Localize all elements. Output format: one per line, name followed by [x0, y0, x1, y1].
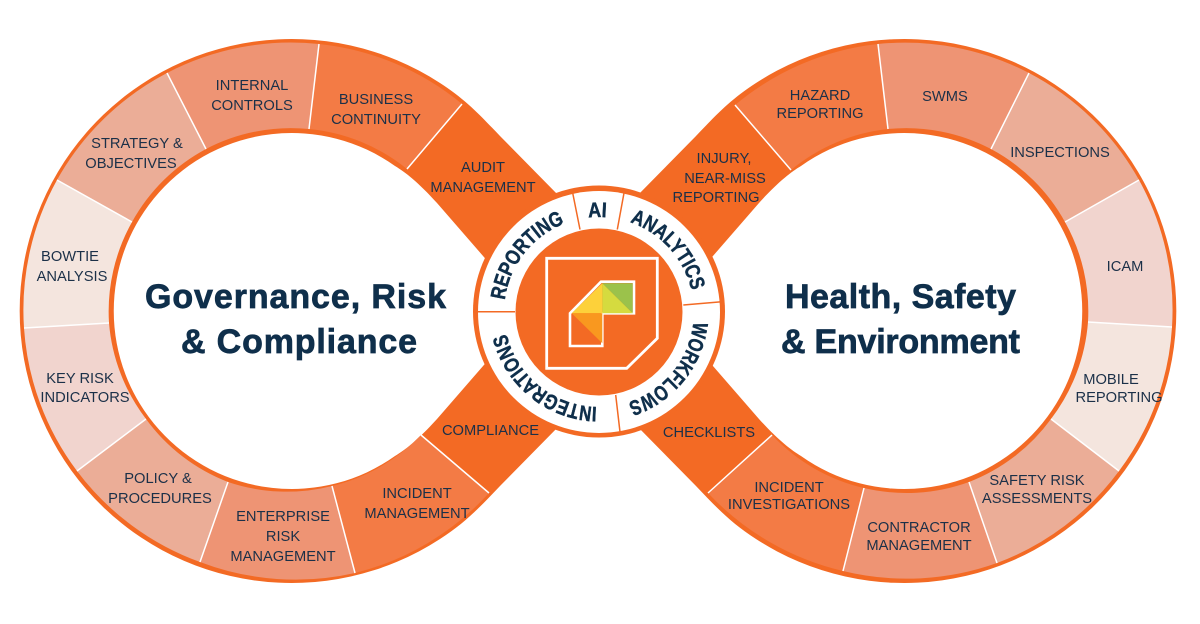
segment: swms: [878, 43, 1029, 149]
segment: audit management: [430, 160, 536, 196]
segment: internal controls: INTERNAL: [216, 78, 288, 94]
heading: governance, risk and compliance: [145, 278, 446, 361]
segment: enterprise risk management: [200, 482, 355, 580]
segment: internal controls: [167, 43, 319, 149]
segment: compliance: COMPLIANCE: [442, 423, 539, 439]
segment: mobile reporting: MOBILE: [1083, 372, 1139, 388]
heading: health, safety and environment: & Environment: [781, 323, 1020, 361]
segment: safety risk assessments: SAFETY RISK: [989, 473, 1085, 489]
icon: logo mark: [570, 282, 634, 346]
segment: policy and procedures: [77, 419, 228, 562]
right loop band: [636, 39, 1176, 583]
segment: enterprise risk management: ENTERPRISE: [236, 509, 330, 525]
segment: icam: ICAM: [1107, 259, 1143, 275]
segment: mobile reporting: [1051, 322, 1172, 471]
segment: incident investigations: [708, 435, 864, 571]
segment: injury near-miss reporting: INJURY,: [697, 151, 751, 167]
segment: incident management: INCIDENT: [382, 486, 452, 502]
right loop interior: [706, 133, 1082, 489]
ring label: integrations: INTEGRATIONS: [493, 335, 596, 422]
segment: strategy and objectives: [57, 73, 206, 222]
segment: policy and procedures: PROCEDURES: [108, 491, 212, 507]
segment: incident management: [332, 435, 489, 573]
segment: hazard reporting: REPORTING: [776, 106, 864, 122]
left loop interior: [114, 133, 490, 489]
segment: contractor management: [843, 482, 997, 579]
segment: inspections: [991, 73, 1139, 222]
segment: injury near-miss reporting: REPORTING: [672, 190, 760, 206]
segment: bowtie analysis: ANALYSIS: [37, 269, 108, 285]
segment: injury near-miss reporting: NEAR-MISS: [684, 171, 766, 187]
ring label: reporting: REPORTING: [490, 212, 563, 300]
segment: incident management: MANAGEMENT: [364, 506, 470, 522]
segment: contractor management: MANAGEMENT: [866, 538, 972, 554]
ring label: analytics: ANALYTICS: [630, 210, 705, 290]
segment: checklists: CHECKLISTS: [663, 425, 755, 441]
segment: safety risk assessments: ASSESSMENTS: [982, 491, 1092, 507]
heading: health, safety and environment: Health, Safety: [785, 278, 1016, 316]
segment: bowtie analysis: [23, 180, 132, 328]
segment: inspections: INSPECTIONS: [1010, 145, 1110, 161]
central hub: [473, 186, 725, 438]
segment: business continuity: CONTINUITY: [331, 112, 421, 128]
segment: injury near-miss reporting: [672, 151, 766, 206]
segment: bowtie analysis: BOWTIE: [41, 249, 99, 265]
segment: key risk indicators: KEY RISK: [46, 371, 114, 387]
segment: icam: [1065, 180, 1173, 327]
segment: mobile reporting: REPORTING: [1075, 390, 1163, 406]
segment: swms: SWMS: [922, 89, 968, 105]
segment: contractor management: CONTRACTOR: [867, 520, 971, 536]
segment: audit management: AUDIT: [461, 160, 505, 176]
ring label: workflows: WORKFLOWS: [630, 324, 708, 416]
segment: enterprise risk management: MANAGEMENT: [230, 549, 336, 565]
left loop band: [20, 39, 560, 583]
ring label: ai: AI: [588, 202, 606, 218]
segment: hazard reporting: HAZARD: [790, 88, 850, 104]
heading: governance, risk and compliance: Governance, Risk: [145, 278, 446, 316]
heading: governance, risk and compliance: & Compliance: [181, 323, 417, 361]
segment: key risk indicators: [24, 323, 146, 471]
segment: strategy and objectives: OBJECTIVES: [85, 156, 177, 172]
segment: strategy and objectives: STRATEGY &: [91, 136, 183, 152]
heading: health, safety and environment: [781, 278, 1020, 361]
segment: internal controls: CONTROLS: [211, 98, 293, 114]
segment: incident investigations: INCIDENT: [754, 480, 824, 496]
segment: business continuity: [309, 44, 462, 169]
segment: policy and procedures: POLICY &: [124, 471, 192, 487]
segment: safety risk assessments: [969, 419, 1119, 563]
segment: business continuity: BUSINESS: [339, 92, 413, 108]
icon: logo document outline: [547, 258, 657, 368]
segment: incident investigations: INVESTIGATIONS: [728, 497, 850, 513]
segment: hazard reporting: [735, 44, 888, 170]
segment: key risk indicators: INDICATORS: [40, 390, 130, 406]
segment: audit management: MANAGEMENT: [430, 180, 536, 196]
segment: enterprise risk management: RISK: [266, 529, 300, 545]
